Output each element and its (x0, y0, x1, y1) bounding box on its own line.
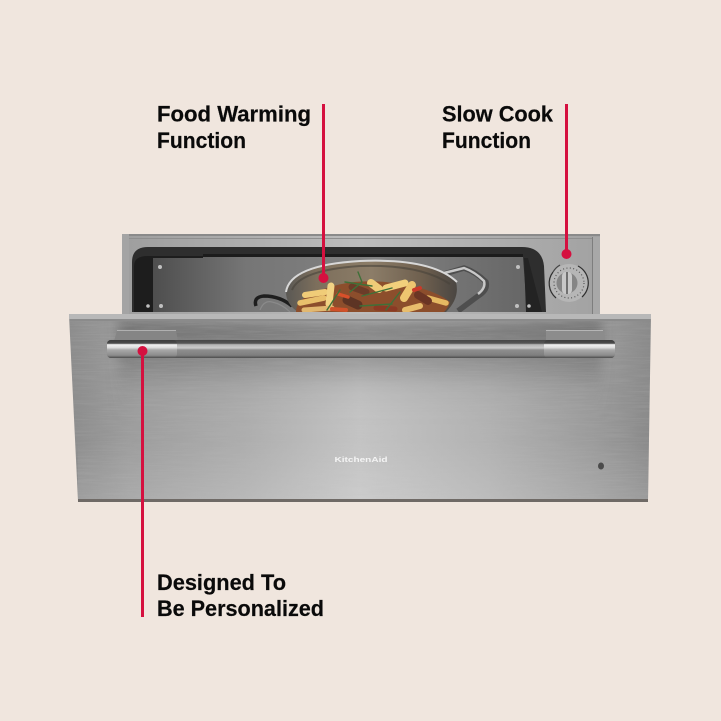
pot body (286, 261, 457, 312)
heading: food warming: Food Warming (157, 102, 311, 126)
heading: personalized: Be Personalized (157, 596, 324, 621)
pointer line (318, 104, 328, 283)
left pot handle (255, 296, 292, 306)
brand logo: KitchenAid (334, 455, 388, 464)
pasta (300, 272, 446, 310)
indicator light (598, 462, 604, 470)
handle bar (107, 340, 615, 358)
callout: personalized (138, 346, 324, 621)
infographic: warming drawer features (69, 104, 651, 617)
heading: food warming: Function (157, 128, 246, 153)
pointer line (562, 104, 572, 259)
right pot handle (444, 268, 486, 311)
control dial (549, 264, 588, 302)
callout: slow cook (442, 102, 572, 259)
handle mounts (114, 330, 605, 341)
pointer line (138, 346, 148, 617)
heading: slow cook: Function (442, 128, 531, 153)
upper frame (122, 234, 600, 316)
pot with pasta (255, 261, 486, 312)
oven cavity (132, 247, 546, 312)
heading: personalized: Designed To (157, 570, 286, 595)
warming drawer appliance (69, 234, 651, 502)
heading: slow cook: Slow Cook (442, 102, 554, 126)
callout: food warming (157, 102, 328, 283)
drawer front panel (69, 314, 651, 502)
